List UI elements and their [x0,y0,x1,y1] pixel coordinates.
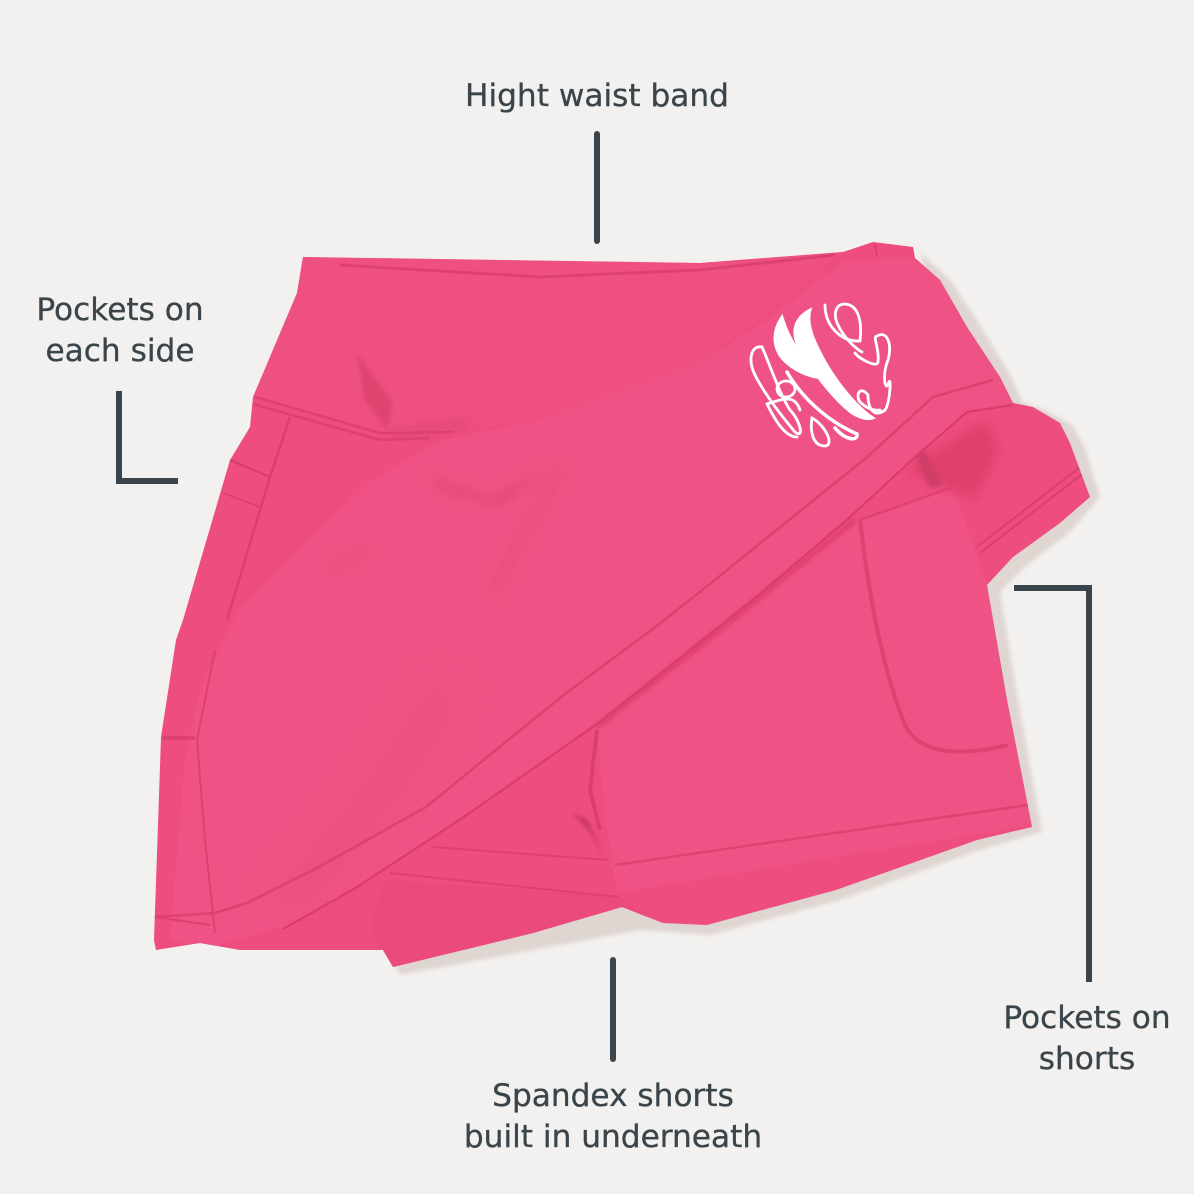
crotch fold [574,814,598,846]
wrap panel stitching [154,380,993,917]
wrap panel edge [283,405,1013,929]
under layer of shorts [383,907,650,967]
label: spandex shorts [464,1078,762,1155]
fold shadow: waistband crease [358,358,392,427]
label: spandex shorts: Spandex shorts [492,1078,734,1114]
wrap panel [170,258,1013,947]
band end tab [875,243,877,256]
label: pockets on each side: Pockets on [36,292,204,328]
side seam [197,650,215,933]
shadow behind garment [393,252,1100,975]
back flap hem stitching [977,467,1084,553]
side pocket [227,417,290,620]
inner shadow under wrap panel [912,423,999,498]
shorts pocket stitching [860,520,1008,752]
hem stitching left [155,917,210,925]
label: pockets on shorts: Pockets on [1003,1000,1171,1036]
icon: white monogram [751,304,890,446]
shadow under wrap edge [597,520,855,727]
left leg stitching [590,730,600,830]
inner darker strap [915,450,942,488]
arrow: waist band line [594,131,600,244]
waistband top seam [340,255,835,277]
arrow: side pocket bracket [116,391,178,484]
fold shadow: waistband right [405,422,462,431]
label: pockets on each side [36,292,204,369]
base silhouette [154,242,1090,967]
waistband lower stitching [253,397,453,440]
label: pockets on shorts: shorts [1039,1041,1135,1077]
label: spandex shorts: built in underneath [464,1119,762,1155]
waistband [253,252,842,397]
label: pockets on each side: each side [45,333,195,369]
left leg of shorts [390,723,620,895]
arrow: spandex line [610,957,616,1062]
skirt illustration [154,242,1100,976]
label: pockets on shorts [1003,1000,1171,1077]
shorts hem stitching [615,805,1028,865]
fold shadows over panel [440,482,520,504]
diagonal body fold [282,690,445,907]
arrow: shorts pocket bracket [1014,585,1092,982]
shorts front panel [987,586,1032,825]
garment [154,242,1090,967]
label: high waist band: Hight waist band [465,78,729,114]
